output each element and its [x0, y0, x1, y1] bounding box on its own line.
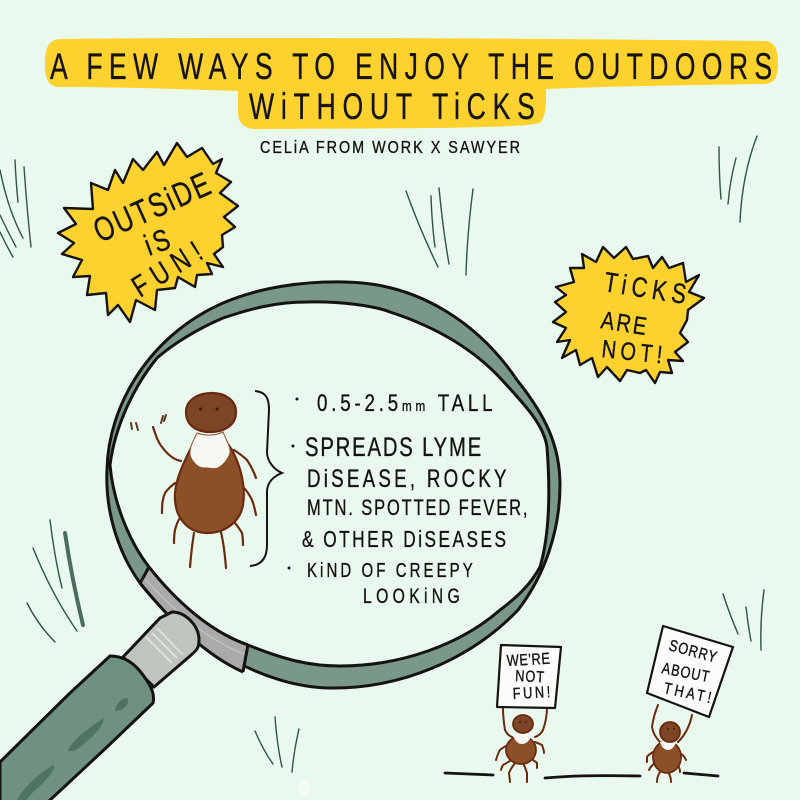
starburst: ticks are not: ARE [599, 306, 648, 341]
small tick with sign: sorry about that: SORRY [667, 637, 719, 667]
ground lines [445, 773, 718, 778]
sign [647, 626, 733, 717]
starburst: ticks are not: NOT! [600, 335, 664, 369]
small tick with sign: we're not fun: NOT [515, 668, 545, 687]
tick facts [288, 390, 528, 608]
wave marks [131, 415, 166, 430]
curly brace [250, 391, 282, 566]
grass tufts [0, 136, 764, 772]
starburst: outside is fun [58, 143, 238, 322]
title banner: A FEW WAYS TO ENJOY THE OUTDOORS [50, 46, 772, 87]
small tick with sign: we're not fun [496, 645, 561, 782]
tick body [175, 440, 244, 533]
handle [0, 656, 154, 800]
sign [497, 645, 561, 708]
small tick with sign: sorry about that [647, 626, 733, 782]
tick facts: KiND OF CREEPY [307, 559, 473, 582]
tick facts: 0.5-2.5 mm TALL [317, 390, 493, 417]
starburst: outside is fun: iS [140, 222, 175, 262]
tick head [186, 393, 236, 432]
starburst: outside is fun: FUN! [126, 235, 208, 304]
tick facts: DiSEASE, ROCKY [307, 464, 507, 493]
legs and arm [153, 427, 256, 568]
ferrule [123, 612, 199, 687]
tick facts: MTN. SPOTTED FEVER, [307, 496, 528, 521]
tick facts: SPREADS LYME [305, 432, 481, 463]
small tick with sign: we're not fun: FUN! [512, 684, 551, 703]
starburst: outside is fun: OUTSiDE [88, 166, 216, 250]
title banner: WiTHOUT TiCKS [249, 86, 535, 127]
small tick with sign: we're not fun: WE'RE [506, 650, 551, 670]
byline: CELiA FROM WORK X SAWYER [260, 138, 520, 157]
tick facts: LOOKiNG [363, 584, 460, 608]
grey collar [140, 567, 248, 672]
starburst: ticks are not [553, 247, 704, 383]
tick facts: & OTHER DiSEASES [302, 528, 506, 553]
main tick illustration [131, 393, 256, 568]
lens ring [107, 282, 560, 688]
title banner [45, 38, 778, 129]
starburst: ticks are not: TiCKS [602, 267, 688, 311]
small tick with sign: sorry about that: THAT! [662, 680, 713, 707]
small tick with sign: sorry about that: ABOUT [660, 660, 711, 687]
white bib [190, 432, 230, 469]
magnifying glass [0, 282, 560, 800]
